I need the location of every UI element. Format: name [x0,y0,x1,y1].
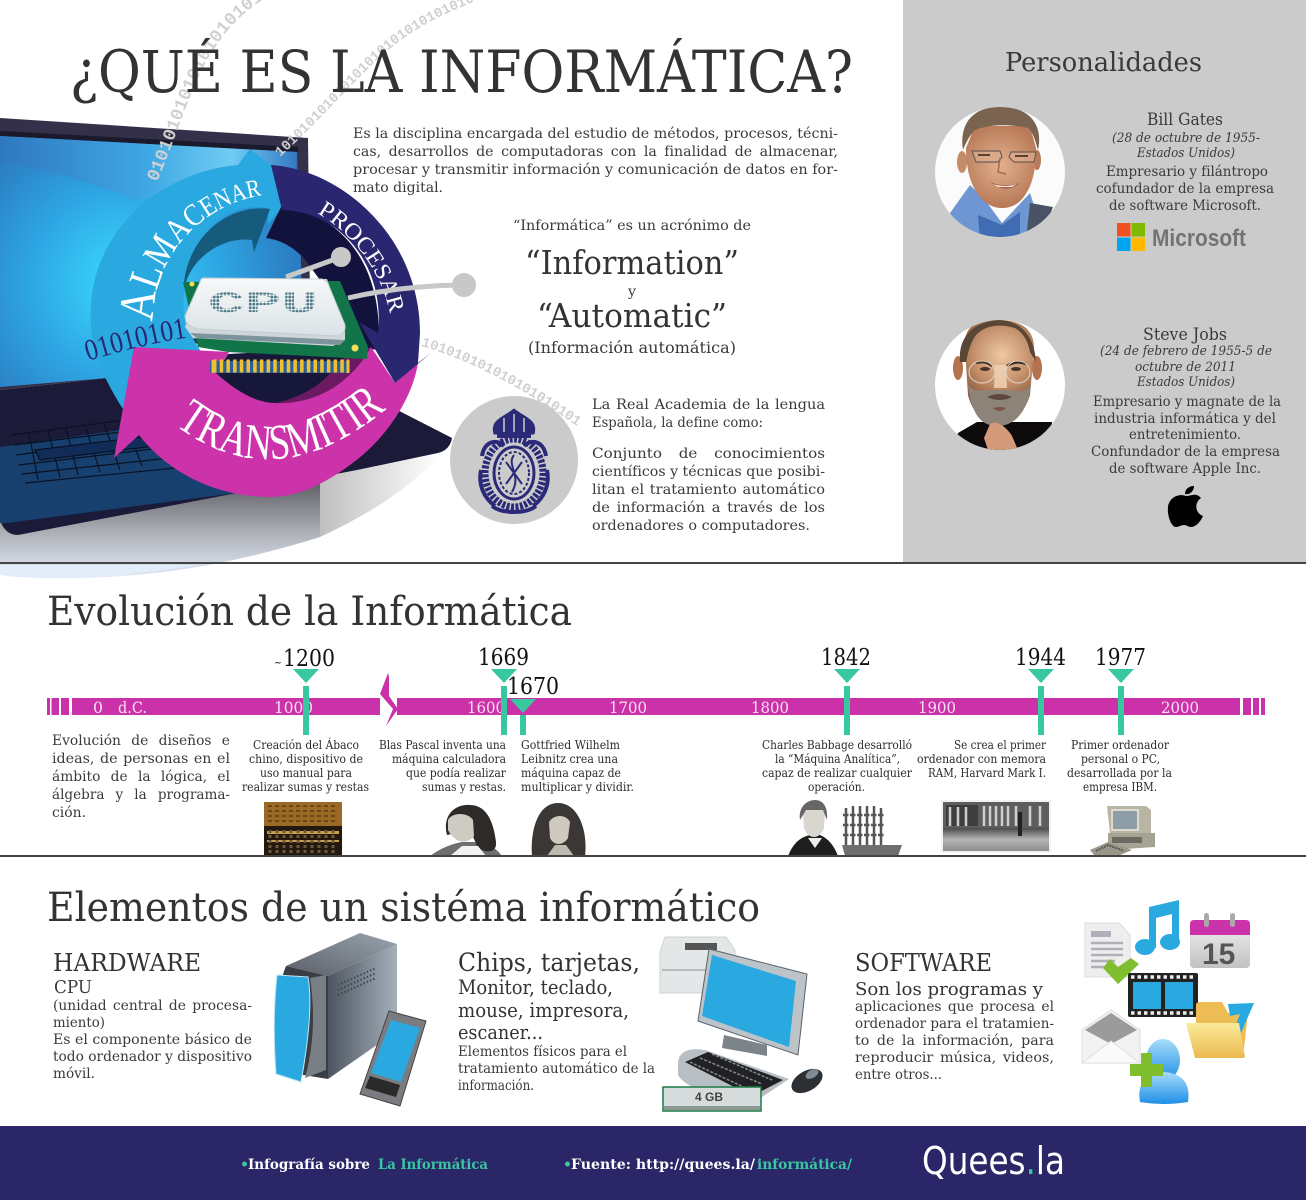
footer text: fuente: Fuente: http://quees.la/ [571,1157,756,1173]
text block: RAE definition: de información a través de los [592,500,825,516]
title: ¿QUÉ ES LA INFORMÁTICA? [70,38,853,106]
caption: Pascal [379,738,506,794]
year labels: 1842 [821,645,871,671]
caption: IBM PC: empresa IBM. [1083,780,1157,794]
text block: definition: procesar y transmitir información y comunicación de datos en for- [353,162,838,178]
heading: personalidades: Personalidades [1005,48,1202,78]
footer text: fuente: informática/ [757,1157,853,1173]
caption: ábaco: Creación del Ábaco [253,737,359,752]
logo: Quees.la: Quees.la [922,1139,1065,1183]
timeline bar: 1800 [751,698,789,717]
CPU label: CPU [208,288,318,322]
icon: desktop computer [660,937,827,1111]
text block: software: entre otros... [855,1067,942,1083]
text block: hardware: todo ordenador y dispositivo [53,1049,252,1065]
image: IBM PC [1090,806,1155,856]
text block: chips: Chips, tarjetas, [458,948,640,977]
text block: Steve Jobs: Steve Jobs [1143,325,1227,345]
image: Harvard Mark I [941,800,1051,853]
cycle arrow: transmitir [114,347,418,497]
text block: acronym: (Información automática) [528,338,736,357]
icon: film strip [1128,973,1198,1017]
caption: Leibniz: máquina capaz de [521,766,621,780]
text block: RAE definition: Española, la define como: [592,415,763,431]
text block: Steve Jobs: Empresario y magnate de la [1093,394,1281,410]
text block: hardware: CPU [54,977,92,998]
text block: RAE definition: litan el tratamiento automático [592,482,825,498]
text block: Steve Jobs: (24 de febrero de 1955-5 de [1100,344,1272,359]
text block: RAE definition: ordenadores o computadores. [592,518,810,534]
cycle arrow: almacenar: ALMACENAR [120,180,262,322]
heading: evolución: Evolución de la Informática [47,589,572,635]
caption: Leibniz: Leibnitz crea una [521,752,618,766]
text block: acronym: y [627,284,636,300]
caption: Babbage: la “Máquina Analítica”, [775,752,900,766]
year labels: 1670 [507,674,559,700]
caption: Leibniz: Gottfried Wilhelm [521,738,621,752]
text block: acronym: “Informática” es un acrónimo de [513,218,751,234]
footer text: infografía: La Informática [378,1157,488,1173]
cycle arrow: transmitir: TRANSMITIR [180,388,386,460]
panel: personalidades [903,0,1306,563]
text block: software [855,949,1055,1083]
year labels: 1200 [283,646,335,672]
image: Blaise Pascal [430,805,502,856]
text block: hardware: móvil. [53,1066,95,1082]
pointer lines [286,248,476,298]
text block: Steve Jobs: industria informática y del [1094,411,1276,427]
text block: software: reproducir música, videos, [855,1050,1054,1066]
caption: ábaco: chino, dispositivo de [249,752,363,766]
text block: RAE definition [592,397,825,534]
footer [0,1126,1306,1200]
icon: calendar: 15 [1202,938,1235,971]
caption: Pascal: que podía realizar [406,766,506,780]
year labels: 1944 [1015,645,1066,671]
icon: Apple logo [1168,486,1203,527]
icon: Real Academia seal [450,396,578,524]
timeline markers [293,669,1134,735]
icon: add user [1130,1039,1189,1104]
text block: timeline intro [52,733,231,821]
caption: ábaco: uso manual para [260,766,352,780]
text block: hardware: HARDWARE [53,949,201,977]
timeline bar: d.C. [118,698,147,717]
caption: Leibniz: multiplicar y dividir. [521,780,634,794]
text block: acronym: “Information” [525,243,739,282]
text block: RAE definition: científicos y técnicas que posibi- [592,464,825,480]
year labels: 1669 [478,645,529,671]
text block: chips: tratamiento automático de la [458,1061,655,1077]
caption: Leibniz [521,738,634,794]
text block: Steve Jobs: de software Apple Inc. [1109,461,1261,477]
text block: timeline intro: ción. [52,805,86,821]
caption: IBM PC [1067,738,1172,794]
caption: IBM PC: personal o PC, [1081,752,1160,766]
caption: Babbage [762,738,912,794]
CPU chip [183,278,368,373]
icon: calendar [1190,913,1250,971]
panel: timeline section [47,589,1265,856]
caption: IBM PC: Primer ordenador [1071,738,1169,752]
footer text: fuente: • [563,1157,572,1173]
text block: timeline intro: ámbito de la lógica, el [52,769,231,785]
text block: Steve Jobs [1091,325,1281,477]
timeline bar: 1600 [467,698,505,717]
caption: Pascal: sumas y restas. [422,780,506,794]
text block: software: SOFTWARE [855,949,992,977]
year labels [274,645,1146,700]
text block: definition: mato digital. [353,180,443,196]
cycle arrow: almacenar [90,149,281,409]
binary text on ring: 01010101 [85,318,186,360]
text block: chips: información. [458,1078,534,1094]
text block: acronym [513,218,751,357]
icon: document [1085,923,1130,977]
image: Gottfried Leibniz [532,803,586,856]
laptop shadow [0,455,440,578]
text block: definition [353,126,838,196]
icon: envelope [1082,1010,1140,1063]
text block: Bill Gates: Bill Gates [1147,110,1223,130]
text block: definition: cas, desarrollos de computadoras con la finalidad de almacenar, [353,144,838,160]
image: abacus [264,802,342,856]
text block: hardware: (unidad central de procesa- [53,998,252,1014]
text block: RAE definition: Conjunto de conocimientos [592,446,825,462]
panel: elementos section [47,885,1254,1111]
icon: folder with music [1186,1002,1254,1058]
caption: Pascal: máquina calculadora [392,752,506,766]
panel: laptop illustration with cycle [0,0,580,578]
text block: chips: Monitor, teclado, [458,975,613,999]
portrait: Bill Gates [935,107,1065,240]
text block: Bill Gates: (28 de octubre de 1955- [1112,131,1260,146]
text block: Steve Jobs: octubre de 2011 [1135,360,1236,375]
icon: computer tower and phone [274,933,426,1106]
portrait: Steve Jobs [935,320,1065,455]
caption: Pascal: Blas Pascal inventa una [379,738,506,752]
timeline bar: 0 [93,698,103,717]
icon: Microsoft logo [1117,223,1246,252]
text block: timeline intro: álgebra y la programa- [52,787,230,803]
text block: hardware: Es el componente básico de [53,1032,252,1048]
icon: Microsoft logo: Microsoft [1152,225,1246,252]
caption: Harvard Mark I [917,738,1046,780]
timeline bar: 2000 [1161,698,1199,717]
text block: software: to de la información, para [855,1033,1054,1049]
phone [360,1011,426,1106]
caption: IBM PC: desarrollada por la [1067,766,1172,780]
icon: check mark [1103,958,1139,984]
text block: hardware: miento) [53,1015,105,1031]
text block: RAE definition: La Real Academia de la lengua [592,397,825,413]
caption: Babbage: Charles Babbage desarrolló [762,738,912,752]
text block: software: ordenador para el tratamien- [855,1016,1054,1032]
text block: Bill Gates: cofundador de la empresa [1096,181,1274,197]
caption: Harvard Mark I: ordenador con memora [917,752,1046,766]
image: Charles Babbage and machine [788,800,902,856]
text block: Steve Jobs: Confundador de la empresa [1091,444,1280,460]
text block: timeline intro: Evolución de diseños e [52,733,230,749]
footer text: infografía [240,1157,488,1173]
laptop [0,118,452,535]
caption: Harvard Mark I: RAM, Harvard Mark I. [928,766,1046,780]
timeline bar: 1900 [918,698,956,717]
text block: chips: Elementos físicos para el [458,1044,627,1060]
timeline bar: 1000 [274,698,313,717]
text block: Bill Gates: de software Microsoft. [1109,198,1261,214]
footer text: infografía: Infografía sobre [248,1157,370,1173]
text block: chips [458,948,655,1094]
text block: Bill Gates: Estados Unidos) [1136,146,1235,161]
heading: elementos: Elementos de un sistéma informático [47,885,760,931]
caption: ábaco [242,737,369,794]
text block: timeline intro: ideas, de personas en el [52,751,231,767]
footer text: infografía: • [240,1157,249,1173]
caption: ábaco: realizar sumas y restas [242,780,369,794]
RAM label: 4 GB [695,1090,723,1104]
caption: Harvard Mark I: Se crea el primer [954,738,1046,752]
text block: Bill Gates: Empresario y filántropo [1106,164,1268,180]
text block: chips: escaner... [458,1020,543,1044]
icon group: software applications [1082,900,1254,1104]
text block: software: Son los programas y [855,979,1044,1000]
timeline bar: 1700 [609,698,647,717]
text block: chips: mouse, impresora, [458,998,629,1022]
caption: Babbage: operación. [808,780,865,794]
text block: acronym: “Automatic” [537,296,727,335]
icon: music note [1135,900,1180,955]
cycle arrow: procesar [271,165,430,383]
timeline bar [47,673,1265,726]
footer text: fuente [563,1157,853,1173]
year labels: ~ [274,656,282,669]
text block: Steve Jobs: Estados Unidos) [1136,375,1235,390]
year labels: 1977 [1095,645,1146,671]
cycle inner band dark [216,205,379,403]
text block: software: aplicaciones que procesa el [855,999,1055,1015]
text block: definition: Es la disciplina encargada del estudio de métodos, procesos, técni- [353,126,838,142]
text block: Steve Jobs: entretenimiento. [1129,427,1241,443]
text block: Bill Gates [1096,110,1274,214]
caption: Babbage: capaz de realizar cualquier [762,766,912,780]
text block: hardware [53,949,252,1082]
cycle arrow: procesar: PROCESAR [318,200,403,314]
